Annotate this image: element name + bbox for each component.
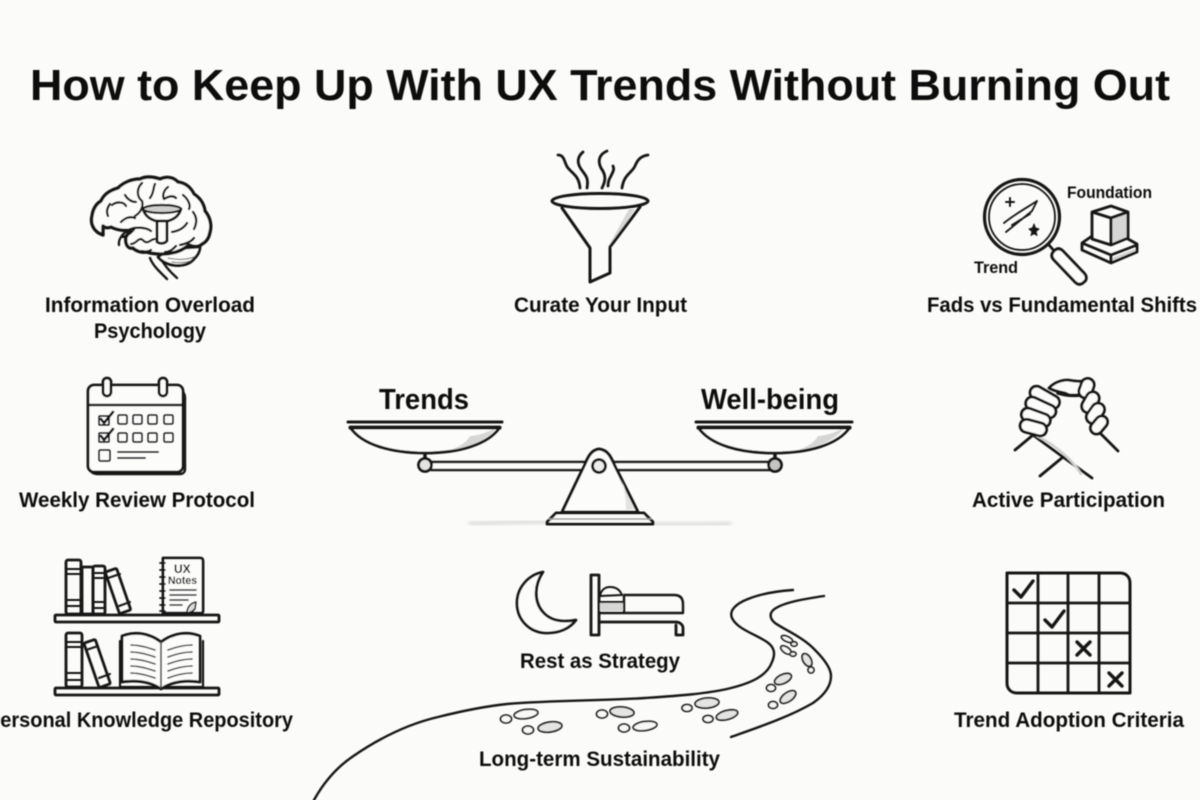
label: Long-term Sustainability <box>479 747 720 771</box>
icon: balance scale <box>348 422 852 525</box>
panel: fads vs fundamental shifts <box>927 180 1197 317</box>
panel: active participation <box>972 377 1165 512</box>
label: trends: Trends <box>379 384 469 416</box>
panel: rest as strategy <box>517 572 683 673</box>
label: well-being: Well-being <box>701 384 839 416</box>
label: trend: Trend <box>974 259 1018 277</box>
label: Information Overload <box>45 293 255 317</box>
note text: UX: UX <box>174 562 191 576</box>
panel: personal knowledge repository <box>0 558 293 732</box>
panel: central balance scale <box>348 384 852 525</box>
icon: crescent moon <box>517 572 576 633</box>
label line 2: Psychology <box>94 319 206 343</box>
note text: Notes: Notes <box>168 575 197 587</box>
icon: bookshelf with notes <box>55 558 219 695</box>
panel: long-term sustainability <box>314 590 831 800</box>
icon: bed <box>591 575 683 635</box>
icon: calendar <box>88 378 185 474</box>
panel: information overload <box>45 177 255 343</box>
label: Weekly Review Protocol <box>19 488 255 512</box>
icon: brain with funnel <box>91 177 211 279</box>
label: Active Participation <box>972 488 1165 512</box>
title: How to Keep Up With UX Trends Without Burning Out <box>30 62 1170 110</box>
icon: winding road <box>314 590 831 800</box>
icon: criteria grid <box>1007 573 1130 693</box>
panel: weekly review protocol <box>19 378 255 512</box>
label: Trend Adoption Criteria <box>954 708 1185 732</box>
label: Curate Your Input <box>514 293 687 317</box>
label: foundation: Foundation <box>1067 184 1152 202</box>
label: Rest as Strategy <box>520 649 680 673</box>
panel: trend adoption criteria <box>954 573 1185 732</box>
icon: magnifier and foundation block <box>984 180 1137 284</box>
panel: curate your input <box>514 151 687 317</box>
icon: footprints <box>500 634 814 734</box>
icon: clasped hands <box>1015 377 1118 478</box>
icon: funnel with noise <box>552 151 648 282</box>
